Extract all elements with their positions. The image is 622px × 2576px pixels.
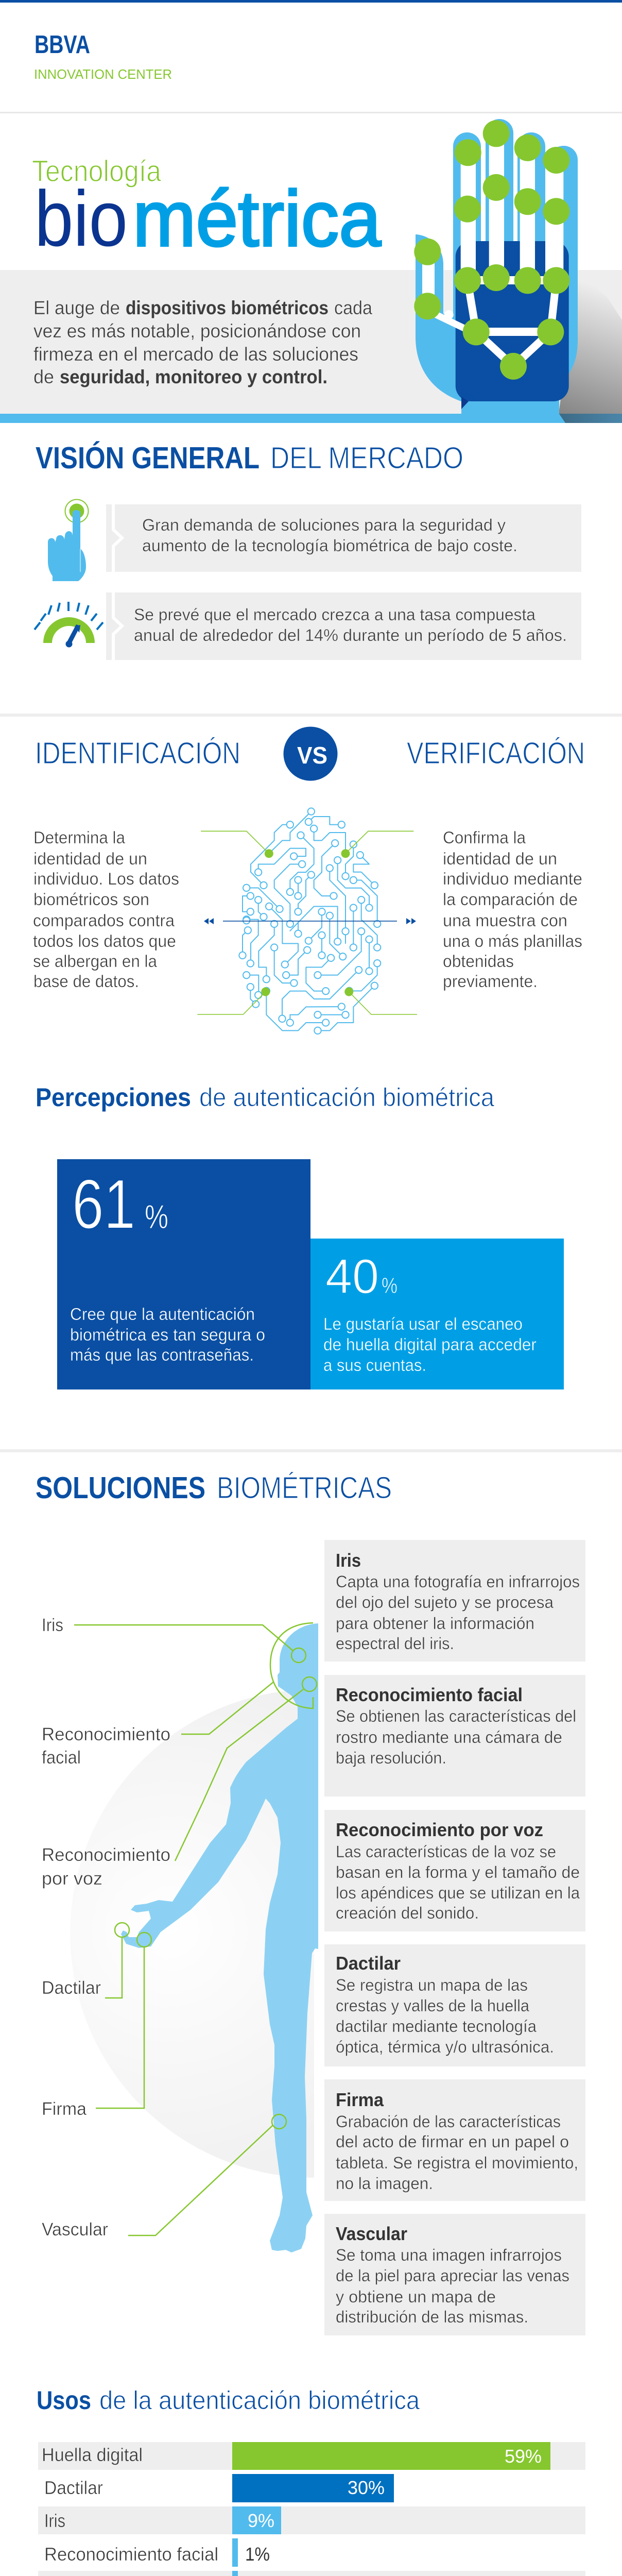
panel: crecimiento (106, 592, 581, 660)
heading: soluciones biométricas: BIOMÉTRICAS (217, 1471, 392, 1505)
panel: dactilar: óptica, térmica y/o ultrasónica. (336, 2038, 554, 2056)
panel: crecimiento: anual de alrededor del 14% durante un período de 5 años. (134, 626, 567, 645)
text: verificación: una o más planillas (443, 931, 582, 951)
panel: vascular (324, 2214, 585, 2335)
panel: firma: Firma (336, 2089, 384, 2110)
labels: figure: facial (42, 1748, 81, 1768)
logo: BBVA Innovation Center (34, 31, 172, 82)
icon: biometric hand (414, 119, 622, 423)
panel: demanda: aumento de la tecnología biométrica de bajo coste. (142, 536, 517, 555)
text: identificación: comparados contra (33, 911, 175, 930)
panel: dactilar: crestas y valles de la huella (336, 1996, 529, 2015)
panel: firma (324, 2079, 585, 2201)
heading: usos: de la autenticación biométrica (99, 2386, 420, 2415)
labels: figure: Reconocimiento (42, 1845, 170, 1865)
bar chart: usos: Huella digital (42, 2444, 143, 2465)
panel: firma: no la imagen. (336, 2174, 433, 2193)
title (32, 155, 382, 263)
panel: reconocimiento facial: Reconocimiento facial (336, 1684, 523, 1705)
bar chart: usos: Dactilar (44, 2477, 103, 2498)
text: verificación (443, 828, 582, 991)
intro text: cada (334, 297, 372, 318)
panel: iris: del ojo del sujeto y se procesa (336, 1593, 554, 1612)
panel: dactilar: Se registra un mapa de las (336, 1976, 528, 1994)
labels: figure: Dactilar (42, 1978, 101, 1998)
labels: figure: Vascular (42, 2219, 108, 2240)
panel: 40% (310, 1239, 564, 1389)
text: identificación: Determina la (33, 828, 126, 847)
bar chart: usos: 1% (245, 2544, 270, 2565)
top bar (0, 0, 622, 3)
text: identificación: se albergan en la (33, 952, 158, 971)
panel: vascular: Vascular (336, 2223, 407, 2244)
panel: 61%: 61 (72, 1165, 135, 1243)
panel: iris: espectral del iris. (336, 1634, 454, 1653)
text: verificación: identidad de un (443, 849, 557, 868)
bar chart: usos: 59% (505, 2446, 542, 2467)
panel: firma: del acto de firmar en un papel o (336, 2132, 569, 2151)
panel: iris: Iris (336, 1550, 361, 1571)
panel: 61%: % (145, 1198, 168, 1235)
bar chart: usos: 30% (348, 2477, 385, 2498)
badge: vs: VS (297, 742, 327, 769)
panel: reconocimiento facial: Se obtienen las características del (336, 1707, 576, 1725)
panel: reconocimiento por voz (324, 1810, 585, 1931)
text: verificación: la comparación de (443, 890, 578, 909)
intro text: El auge de (33, 297, 120, 318)
panel: 40%: Le gustaría usar el escaneo (323, 1314, 523, 1333)
heading: visión general del mercado (36, 441, 463, 475)
bar chart: usos: Reconocimiento facial (44, 2544, 218, 2565)
icon: pointing hand (48, 500, 89, 581)
text: verificación: una muestra con (443, 911, 567, 930)
intro text: vez es más notable, posicionándose con (33, 320, 361, 342)
panel: 61%: Cree que la autenticación (70, 1304, 255, 1324)
text: verificación: Confirma la (443, 828, 526, 847)
text: verificación: obtenidas (443, 952, 514, 971)
panel: reconocimiento por voz: Las características de la voz se (336, 1842, 556, 1861)
panel: dactilar (324, 1944, 585, 2066)
panel: iris: para obtener la información (336, 1614, 534, 1633)
panel: iris (324, 1540, 585, 1662)
heading: percepciones (36, 1083, 494, 1112)
bar chart: usos (38, 2442, 585, 2576)
panel: reconocimiento por voz: los apéndices que se utilizan en la (336, 1884, 580, 1902)
labels: figure: Reconocimiento (42, 1724, 170, 1744)
heading: soluciones biométricas (36, 1471, 392, 1505)
panel: reconocimiento facial: baja resolución. (336, 1749, 446, 1767)
title: métrica (133, 175, 382, 263)
text: identificación: identidad de un (33, 849, 147, 868)
labels: figure (42, 1615, 170, 2240)
text: verificación: individuo mediante (443, 869, 582, 888)
intro text: dispositivos biométricos (126, 297, 329, 318)
panel: firma: Grabación de las características (336, 2112, 561, 2131)
panel: 40%: % (382, 1274, 398, 1298)
badge: vs (283, 726, 338, 781)
text: identificación: biométricos son (33, 890, 149, 909)
labels: figure: Iris (42, 1615, 63, 1635)
intro text (33, 297, 372, 387)
panel: dactilar: Dactilar (336, 1953, 401, 1974)
panel: reconocimiento facial (324, 1675, 585, 1797)
panel: 40%: a sus cuentas. (323, 1355, 426, 1375)
heading: soluciones biométricas: SOLUCIONES (36, 1471, 205, 1505)
panel: demanda: Gran demanda de soluciones para la seguridad y (142, 516, 506, 534)
logo: BBVA Innovation Center: INNOVATION CENTER (34, 66, 172, 82)
icon: gauge (34, 602, 103, 647)
bar chart: usos: Iris (44, 2510, 65, 2531)
logo: BBVA Innovation Center: BBVA (34, 31, 90, 59)
heading: verificación: VERIFICACIÓN (407, 736, 585, 770)
panel: reconocimiento por voz: creación del sonido. (336, 1904, 479, 1922)
labels: figure: Firma (42, 2099, 87, 2119)
panel: dactilar: dactilar mediante tecnología (336, 2017, 537, 2036)
panel: 61%: más que las contraseñas. (70, 1345, 254, 1364)
panel: 40%: 40 (325, 1249, 379, 1304)
title: bio (34, 175, 128, 263)
chart: circuit fingerprint brain (197, 808, 417, 1034)
text: verificación: previamente. (443, 972, 538, 991)
intro text: firmeza en el mercado de las soluciones (33, 344, 358, 365)
text: identificación: individuo. Los datos (33, 869, 179, 888)
panel: vascular: Se toma una imagen infrarrojos (336, 2246, 562, 2264)
intro text: seguridad, monitoreo y control. (60, 366, 327, 387)
panel: firma: tableta. Se registra el movimiento, (336, 2154, 578, 2172)
panel: crecimiento: Se prevé que el mercado crezca a una tasa compuesta (134, 605, 535, 624)
intro grey band (0, 270, 622, 414)
panel: reconocimiento por voz: basan en la forma y el tamaño de (336, 1863, 580, 1882)
labels: figure: por voz (42, 1869, 102, 1889)
bar chart: usos: 9% (248, 2510, 274, 2531)
callouts: figure pointers (74, 1623, 317, 2235)
panel: vascular: y obtiene un mapa de (336, 2287, 496, 2306)
panel: 40%: de huella digital para acceder (323, 1335, 537, 1354)
heading: visión general del mercado: DEL MERCADO (270, 441, 463, 475)
heading: visión general del mercado: VISIÓN GENERAL (36, 441, 260, 475)
text: identificación: base de datos. (33, 972, 139, 991)
heading: usos: Usos (37, 2386, 91, 2415)
panel: reconocimiento facial: rostro mediante una cámara de (336, 1728, 562, 1747)
panel: iris: Capta una fotografía en infrarrojos (336, 1572, 580, 1591)
panel: 61%: biométrica es tan segura o (70, 1325, 265, 1344)
panel: 61% (57, 1159, 310, 1389)
text: identificación (33, 828, 179, 991)
panel: vascular: distribución de las mismas. (336, 2308, 528, 2326)
blue band under intro (0, 414, 622, 423)
heading: percepciones: Percepciones (36, 1083, 191, 1112)
panel: vascular: de la piel para apreciar las venas (336, 2266, 569, 2285)
heading: identificación: IDENTIFICACIÓN (35, 736, 240, 770)
panel: demanda (106, 504, 581, 572)
title: Tecnología (32, 155, 162, 188)
intro text: de (33, 366, 54, 387)
halo behind figure (70, 1689, 314, 2178)
panel: reconocimiento por voz: Reconocimiento por voz (336, 1819, 543, 1840)
figure: human silhouette (121, 1623, 318, 2252)
heading: percepciones: de autenticación biométrica (199, 1083, 494, 1112)
text: identificación: todos los datos que (33, 931, 176, 951)
